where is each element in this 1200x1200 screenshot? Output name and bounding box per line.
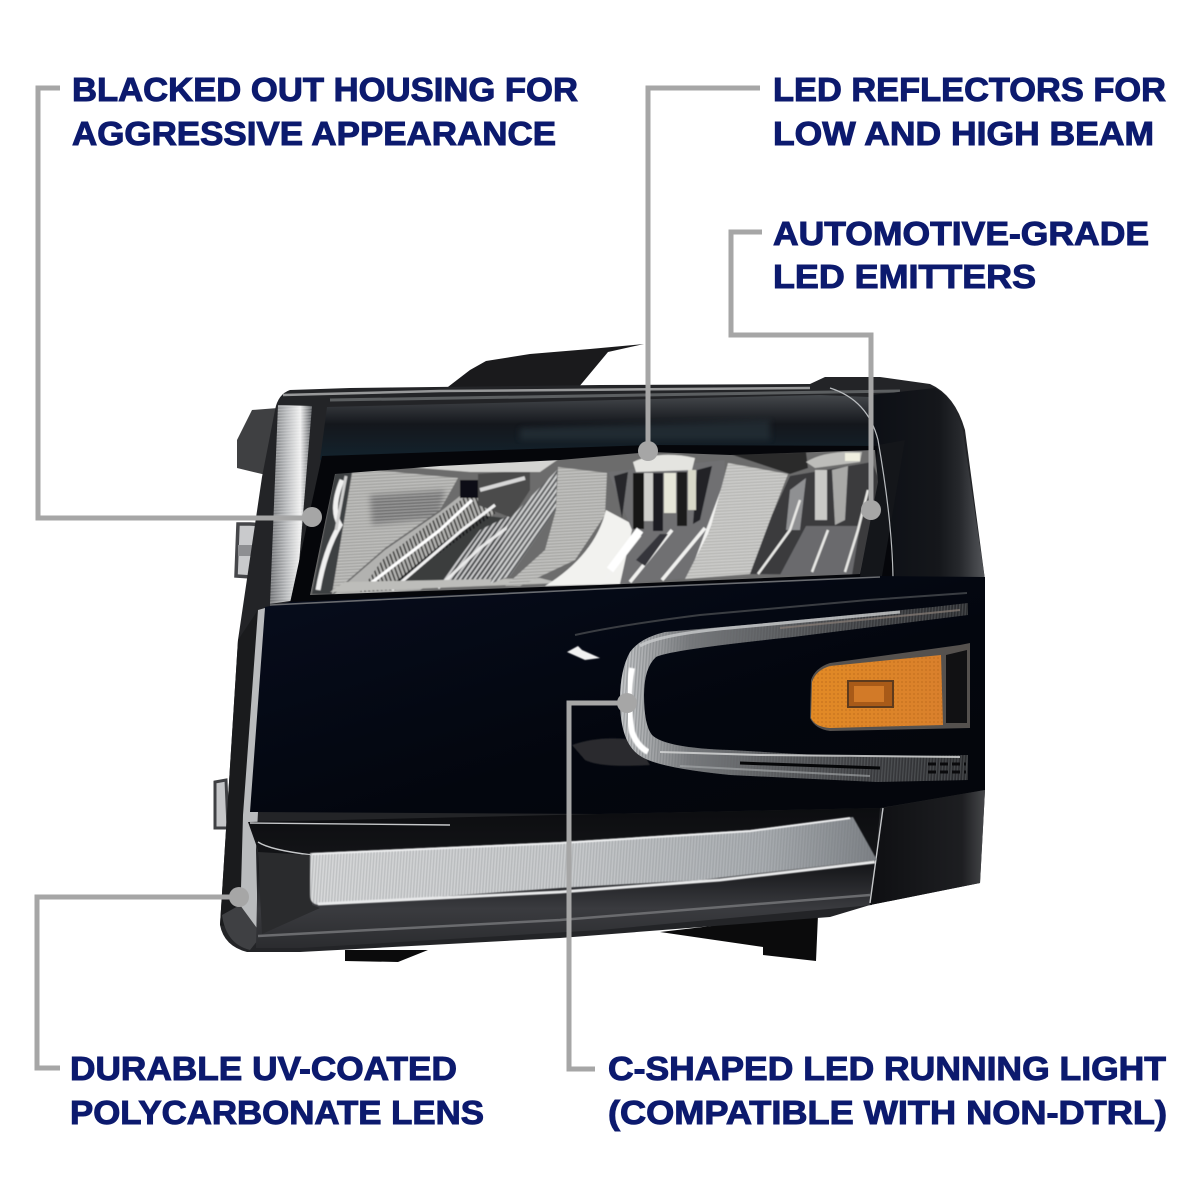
reflector unit 2	[505, 455, 730, 586]
left mounting clips	[215, 408, 278, 828]
label: LED reflectors: LOW AND HIGH BEAM	[773, 115, 1154, 152]
reflector unit 3	[685, 452, 880, 579]
black reflector frame	[290, 445, 895, 603]
callout leader lines	[37, 88, 881, 1069]
reflector unit 1	[330, 458, 560, 596]
label: polycarbonate lens: POLYCARBONATE LENS	[70, 1094, 484, 1131]
LED light bar	[310, 817, 877, 905]
panel top highlight line	[270, 577, 880, 605]
leader: LED reflectors	[638, 88, 760, 461]
left lens stripes	[270, 405, 312, 604]
label: LED emitters: AUTOMOTIVE-GRADE	[773, 215, 1149, 252]
lower lens seam	[250, 808, 883, 903]
main black panel	[245, 576, 985, 814]
label: polycarbonate lens: DURABLE UV-COATED	[70, 1050, 457, 1087]
amber side marker	[810, 643, 970, 731]
label: C-shaped running light	[608, 1050, 1167, 1131]
label: blacked out housing	[72, 71, 578, 152]
label: LED reflectors	[773, 71, 1166, 152]
bottom left dark well	[258, 852, 320, 934]
label: C-shaped running light: (COMPATIBLE WITH NON-DTRL)	[608, 1094, 1167, 1131]
lower right corner block	[870, 790, 985, 905]
left lower lens band	[220, 608, 265, 950]
bottom rim	[258, 895, 870, 936]
label: LED emitters: LED EMITTERS	[773, 258, 1036, 295]
label: blacked out housing: BLACKED OUT HOUSING FOR	[72, 71, 578, 108]
leader: polycarbonate lens	[37, 887, 249, 1068]
label: LED reflectors: LED REFLECTORS FOR	[773, 71, 1166, 108]
outer housing	[220, 377, 985, 952]
gloss highlight	[567, 646, 600, 660]
label: blacked out housing: AGGRESSIVE APPEARANCE	[72, 115, 556, 152]
leader: C-shaped running light	[569, 693, 637, 1069]
leader: blacked out housing	[38, 88, 322, 527]
top rim highlights	[283, 388, 900, 400]
right corner panel	[870, 388, 985, 600]
LED reflector bowl	[310, 450, 878, 595]
bottom mounting tabs	[345, 915, 818, 962]
leader: LED emitters	[731, 232, 881, 520]
headlight assembly	[215, 344, 985, 962]
C-shaped LED running light	[575, 593, 968, 782]
label: C-shaped running light: C-SHAPED LED RUNNING LIGHT	[608, 1050, 1166, 1087]
label: LED emitters	[773, 215, 1149, 295]
upper band sheen	[520, 420, 770, 440]
lower gloss shading	[572, 738, 650, 766]
top mounting bracket	[444, 344, 644, 390]
label: polycarbonate lens	[70, 1050, 484, 1131]
upper dark band	[320, 395, 975, 578]
thin lens seam	[830, 388, 893, 577]
left chrome sliver	[312, 470, 352, 594]
dark lens area right of reflector	[860, 440, 905, 577]
lower lens section	[248, 808, 880, 948]
left translucent lens band	[270, 405, 312, 604]
